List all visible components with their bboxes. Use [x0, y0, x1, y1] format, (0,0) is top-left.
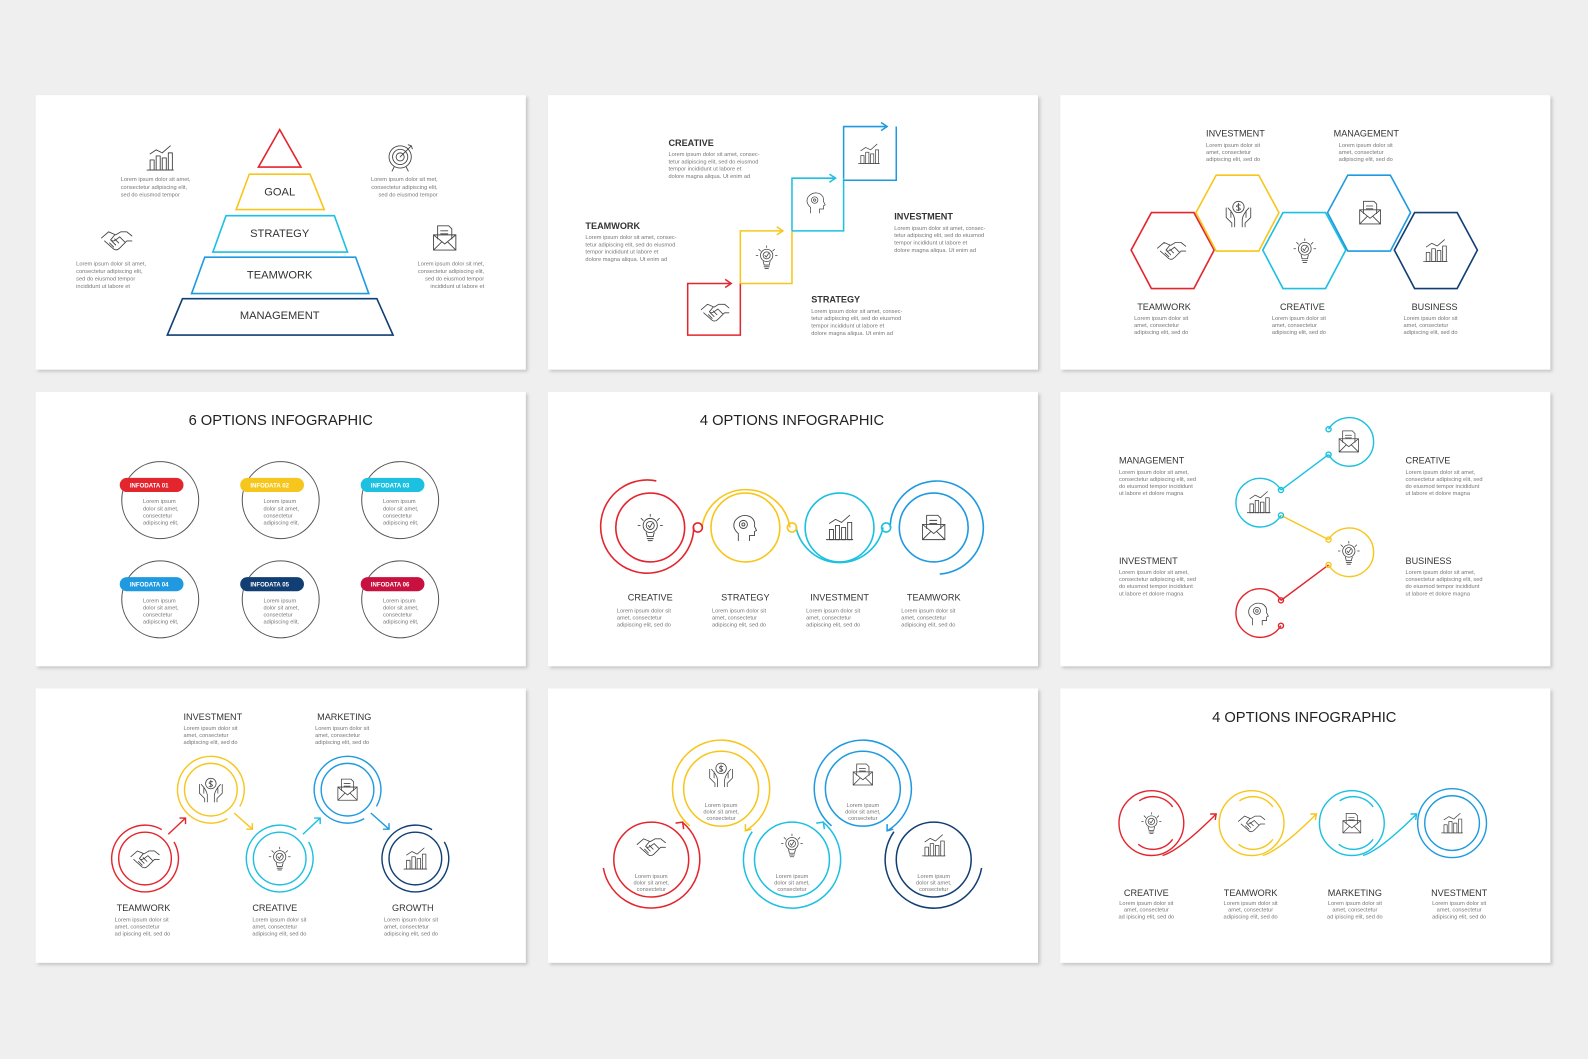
text block: creative: amet, consectetur [1272, 323, 1317, 329]
text block: management: Lorem ipsum dolor sit amet, [1119, 470, 1189, 476]
ring texts: Lorem ipsum [705, 803, 738, 809]
pyramid chart [167, 130, 393, 335]
labels: Lorem ipsum dolor sit [1328, 901, 1382, 907]
labels: Lorem ipsum dolor sit [617, 609, 671, 615]
circles with pills [120, 462, 439, 638]
labels: ad ipiscing elit, sed do [115, 931, 170, 937]
labels: amet, consectetur [1124, 908, 1169, 914]
icon: chart [147, 146, 173, 170]
text block: handshake: consectetur adipiscing elit, [76, 269, 143, 275]
text block: target: Lorem ipsum dolor sit met, [371, 177, 438, 183]
text block: business: Lorem ipsum dolor sit amet, [1406, 570, 1476, 576]
text block: investment: Lorem ipsum dolor sit amet, consec- [894, 226, 986, 232]
panel: 4 options arrows [1060, 688, 1550, 963]
circles with pills: dolor sit amet, [263, 506, 299, 512]
labels: adipiscing elit, sed do [806, 623, 860, 629]
text block: creative: CREATIVE [1280, 302, 1325, 312]
text block: management: ut labore et dolore magna [1119, 491, 1184, 497]
labels: ad ipiscing elit, sed do [1118, 914, 1174, 920]
text block: handshake: sed do eiusmod tempor [76, 276, 135, 282]
text block: business: amet, consectetur [1403, 323, 1449, 329]
circles with pills: Lorem ipsum [263, 499, 296, 505]
text block: investment: consectetur adipiscing elit, sed [1119, 577, 1196, 583]
text block: strategy: dolore magna aliqua. Ut enim ad [811, 331, 893, 337]
labels: Lorem ipsum dolor sit [1224, 901, 1278, 907]
text block: investment: Lorem ipsum dolor sit [1206, 143, 1261, 149]
text block: investment: INVESTMENT [1119, 556, 1178, 566]
circles with pills: consectetur [263, 613, 293, 619]
panel: big rings [548, 688, 1038, 963]
text block: business: adipiscing elit, sed do [1403, 330, 1458, 336]
text block: creative: ut labore et dolore magna [1406, 491, 1471, 497]
text block: target: consectetur adipiscing elit, [371, 185, 438, 191]
icon: handshake [101, 232, 132, 250]
circles with pills: adipiscing elit, [263, 620, 299, 626]
title: 6 OPTIONS INFOGRAPHIC [189, 413, 373, 429]
text block: creative: Lorem ipsum dolor sit [1272, 316, 1326, 322]
labels [617, 592, 961, 629]
text block: creative: Lorem ipsum dolor sit amet, [1406, 470, 1476, 476]
circles with pills: Lorem ipsum [263, 598, 296, 604]
panel: zigzag circles [1060, 392, 1550, 666]
ring texts: Lorem ipsum [635, 874, 668, 880]
labels: INVESTMENT [810, 592, 869, 602]
panel: wave circles with arrows [36, 688, 526, 963]
circles with pills: Lorem ipsum [383, 499, 416, 505]
text block: envelope: consectetur adipiscing elit, [418, 269, 485, 275]
labels: adipiscing elit, sed do [901, 623, 955, 629]
circles with pills: INFODATA 02 [250, 483, 290, 489]
circles with pills: Lorem ipsum [143, 598, 176, 604]
text block: investment: Lorem ipsum dolor sit amet, [1119, 570, 1189, 576]
labels: adipiscing elit, sed do [315, 740, 369, 746]
text block: strategy: STRATEGY [811, 295, 860, 305]
ring texts: consectetur [637, 887, 666, 893]
ring texts: consectetur [919, 887, 948, 893]
title: 4 OPTIONS INFOGRAPHIC [700, 413, 884, 429]
pyramid chart: STRATEGY [250, 228, 310, 240]
labels: ad ipiscing elit, sed do [1327, 914, 1383, 920]
labels: amet, consectetur [1437, 908, 1482, 914]
text block: teamwork: dolore magna aliqua. Ut enim ad [585, 257, 667, 263]
text block: teamwork: amet, consectetur [1134, 323, 1179, 329]
text block: business: Lorem ipsum dolor sit [1403, 316, 1458, 322]
ring texts: dolor sit amet, [916, 880, 952, 886]
labels: Lorem ipsum dolor sit [901, 609, 956, 615]
labels: adipiscing elit, sed do [184, 740, 238, 746]
text block: investment: amet, consectetur [1206, 150, 1251, 156]
text block: creative: tempor incididunt ut labore et [668, 167, 742, 173]
text block: investment: INVESTMENT [894, 212, 953, 222]
labels: amet, consectetur [617, 616, 662, 622]
text block: chart: consectetur adipiscing elit, [121, 185, 188, 191]
panel: hexagons [1060, 95, 1550, 370]
text block: management: adipiscing elit, sed do [1339, 157, 1393, 163]
text block: management: MANAGEMENT [1119, 456, 1185, 466]
circles with pills: consectetur [143, 613, 172, 619]
text block: investment: ut labore et dolore magna [1119, 591, 1184, 597]
ring texts: Lorem ipsum [917, 874, 950, 880]
labels: Lorem ipsum dolor sit [115, 917, 169, 923]
text block: teamwork: TEAMWORK [1137, 302, 1191, 312]
text block: creative: CREATIVE [668, 138, 714, 148]
pyramid chart: GOAL [264, 186, 295, 198]
text block: creative: CREATIVE [1406, 456, 1450, 466]
labels [1118, 888, 1488, 920]
text block: creative: dolore magna aliqua. Ut enim ad [668, 174, 750, 180]
labels: amet, consectetur [252, 924, 297, 930]
labels: Lorem ipsum dolor sit [1432, 901, 1487, 907]
text block: business: ut labore et dolore magna [1406, 591, 1471, 597]
text block: teamwork: adipiscing elit, sed do [1134, 330, 1188, 336]
circles with pills: INFODATA 06 [371, 583, 410, 589]
labels: Lorem ipsum dolor sit [184, 726, 238, 732]
circles with pills: consectetur [383, 613, 412, 619]
circles with pills: adipiscing elit, [143, 520, 179, 526]
text block: teamwork: tempor incididunt ut labore et [585, 250, 659, 256]
text block: investment: dolore magna aliqua. Ut enim ad [894, 248, 976, 254]
zigzag chart [1236, 418, 1374, 637]
circles with pills: INFODATA 01 [130, 483, 169, 489]
text block: business: BUSINESS [1412, 302, 1458, 312]
ring texts: consectetur [706, 816, 736, 822]
arrow circles chart [1119, 789, 1487, 858]
text block: investment: adipiscing elit, sed do [1206, 157, 1260, 163]
labels: amet, consectetur [315, 733, 360, 739]
circles with pills: consectetur [143, 513, 172, 519]
labels: Lorem ipsum dolor sit [252, 917, 307, 923]
text block: creative: do eiusmod tempor incididunt [1406, 484, 1480, 490]
ring texts: Lorem ipsum [776, 874, 809, 880]
labels: Lorem ipsum dolor sit [315, 726, 370, 732]
text block: creative: consectetur adipiscing elit, sed [1406, 477, 1483, 483]
circles with pills: Lorem ipsum [383, 598, 416, 604]
labels: GROWTH [392, 903, 434, 913]
icon: envelope [434, 226, 456, 250]
labels: CREATIVE [1124, 888, 1169, 898]
text block: management: do eiusmod tempor incididunt [1119, 484, 1193, 490]
ring texts: dolor sit amet, [633, 880, 669, 886]
text block: chart: sed do eiusmod tempor [121, 192, 180, 198]
circles with pills: adipiscing elit, [383, 520, 419, 526]
circles with pills: dolor sit amet, [383, 605, 419, 611]
labels: Lorem ipsum dolor sit [712, 609, 766, 615]
text block: envelope: sed do eiusmod tempor [425, 276, 484, 282]
labels: TEAMWORK [117, 903, 170, 913]
text block: chart: Lorem ipsum dolor sit amet, [121, 177, 191, 183]
labels: CREATIVE [252, 903, 297, 913]
circles with pills: dolor sit amet, [143, 605, 179, 611]
labels: amet, consectetur [712, 616, 757, 622]
labels: TEAMWORK [1224, 888, 1277, 898]
text block: business: do eiusmod tempor incididunt [1406, 584, 1480, 590]
rings chart [603, 740, 982, 908]
panel: 4 options chain [548, 392, 1038, 666]
labels [115, 712, 438, 937]
labels: MARKETING [1328, 888, 1382, 898]
panel: stairs [548, 95, 1038, 370]
ring texts: dolor sit amet, [845, 809, 881, 815]
circles with pills: INFODATA 03 [371, 483, 410, 489]
labels: adipiscing elit, sed do [617, 623, 671, 629]
ring texts: consectetur [777, 887, 807, 893]
circles with pills: consectetur [383, 513, 412, 519]
labels: amet, consectetur [1228, 908, 1273, 914]
text block: business: consectetur adipiscing elit, sed [1406, 577, 1483, 583]
text block: creative: adipiscing elit, sed do [1272, 330, 1326, 336]
labels: INVESTMENT [184, 712, 243, 722]
labels: amet, consectetur [901, 616, 946, 622]
labels: adipiscing elit, sed do [1224, 914, 1278, 920]
wave chart [112, 756, 449, 892]
labels: adipiscing elit, sed do [712, 623, 766, 629]
text block: strategy: tetur adipiscing elit, sed do eiusmod [811, 316, 901, 322]
circles with pills: adipiscing elit, [143, 620, 179, 626]
circles with pills: dolor sit amet, [143, 506, 179, 512]
circles with pills: adipiscing elit, [263, 520, 299, 526]
labels: Lorem ipsum dolor sit [1119, 901, 1174, 907]
chain chart [601, 480, 983, 574]
text block: target: sed do eiusmod tempor [379, 192, 438, 198]
text block: investment: INVESTMENT [1206, 129, 1265, 139]
text block: business: BUSINESS [1406, 556, 1452, 566]
labels: TEAMWORK [907, 592, 961, 602]
text block: teamwork: Lorem ipsum dolor sit amet, consec- [585, 235, 677, 241]
labels: CREATIVE [628, 592, 673, 602]
labels: STRATEGY [721, 592, 770, 602]
text block: investment: tetur adipiscing elit, sed do eiusmod [894, 233, 984, 239]
ring texts [633, 803, 952, 893]
text block: teamwork: Lorem ipsum dolor sit [1134, 316, 1189, 322]
labels: amet, consectetur [384, 924, 429, 930]
text block: management: amet, consectetur [1339, 150, 1384, 156]
text block: strategy: Lorem ipsum dolor sit amet, consec- [811, 309, 902, 315]
labels: Lorem ipsum dolor sit [806, 609, 861, 615]
text block: investment: do eiusmod tempor incididunt [1119, 584, 1193, 590]
ring texts: Lorem ipsum [846, 803, 879, 809]
icon: target [389, 145, 412, 171]
text block: handshake: incididunt ut labore et [76, 284, 130, 290]
panel: pyramid [36, 95, 526, 370]
labels: adipiscing elit, sed do [1432, 914, 1486, 920]
text block: investment: tempor incididunt ut labore et [894, 241, 968, 247]
pyramid chart: MANAGEMENT [240, 310, 320, 322]
circles with pills: consectetur [263, 513, 293, 519]
text block: creative: Lorem ipsum dolor sit amet, consec- [668, 152, 760, 158]
text block: teamwork: TEAMWORK [585, 221, 641, 231]
labels: MARKETING [317, 712, 371, 722]
ring texts: consectetur [848, 816, 878, 822]
text block: handshake: Lorem ipsum dolor sit amet, [76, 261, 146, 267]
text block: creative: tetur adipiscing elit, sed do eiusmod [668, 159, 758, 165]
circles with pills: adipiscing elit, [383, 620, 419, 626]
panel: 6 options [36, 392, 526, 666]
text block: teamwork: tetur adipiscing elit, sed do eiusmod [585, 242, 675, 248]
labels: adipiscing elit, sed do [252, 931, 306, 937]
ring texts: dolor sit amet, [774, 880, 810, 886]
text block: envelope: Lorem ipsum dolor sit met, [418, 261, 485, 267]
hexagon chart [1131, 175, 1477, 289]
circles with pills: dolor sit amet, [383, 506, 419, 512]
stairs chart [688, 123, 896, 335]
labels: amet, consectetur [1332, 908, 1377, 914]
pyramid chart: TEAMWORK [247, 269, 313, 281]
text block: strategy: tempor incididunt ut labore et [811, 324, 885, 330]
title: 4 OPTIONS INFOGRAPHIC [1212, 710, 1397, 726]
circles with pills: dolor sit amet, [263, 605, 299, 611]
text block: management: Lorem ipsum dolor sit [1339, 143, 1393, 149]
ring texts: dolor sit amet, [703, 809, 739, 815]
circles with pills: Lorem ipsum [143, 499, 176, 505]
labels: amet, consectetur [115, 924, 160, 930]
circles with pills: INFODATA 05 [250, 583, 290, 589]
labels: amet, consectetur [184, 733, 229, 739]
labels: NVESTMENT [1431, 888, 1488, 898]
labels: Lorem ipsum dolor sit [384, 917, 438, 923]
text block: management: MANAGEMENT [1334, 129, 1399, 139]
labels: adipiscing elit, sed do [384, 931, 438, 937]
circles with pills: INFODATA 04 [130, 583, 169, 589]
text block: management: consectetur adipiscing elit, sed [1119, 477, 1196, 483]
labels: amet, consectetur [806, 616, 851, 622]
text block: envelope: incididunt ut labore et [430, 284, 485, 290]
